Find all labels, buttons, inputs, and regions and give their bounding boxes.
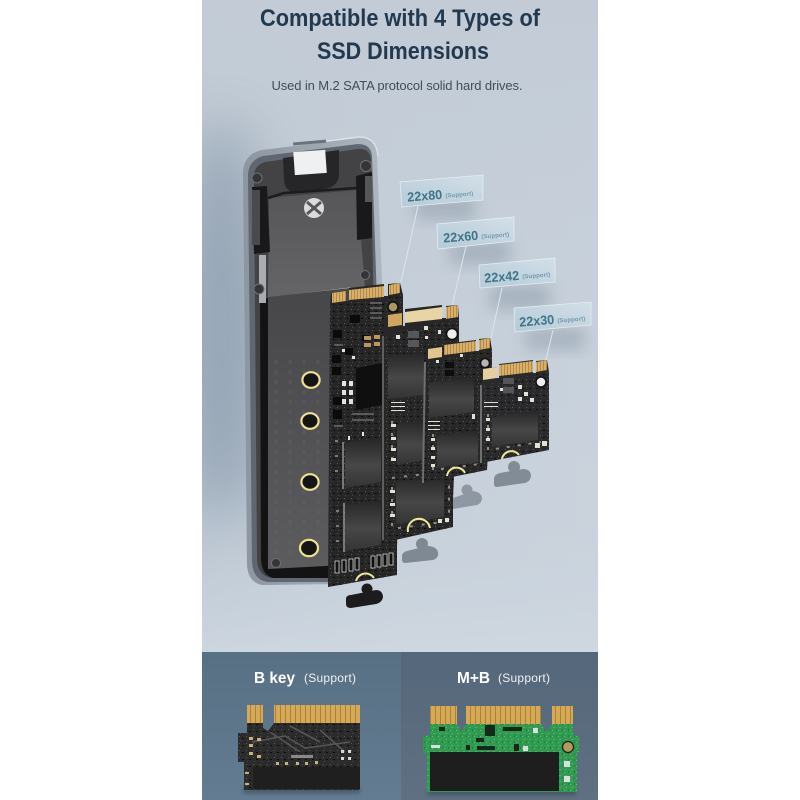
subtitle text: Used in M.2 SATA protocol solid hard drives. xyxy=(272,78,522,93)
components xyxy=(332,315,369,419)
enclosure: open SSD case xyxy=(243,137,384,585)
M+B board xyxy=(423,706,579,795)
label shadows xyxy=(415,195,585,350)
label: 22x80: (Support) xyxy=(445,191,474,200)
components xyxy=(484,385,547,448)
ghost screw: 22x30 xyxy=(494,461,531,487)
label: 22x30: 22x30 xyxy=(519,312,555,330)
chip solder pads xyxy=(433,434,480,470)
side clips xyxy=(252,172,372,254)
chips xyxy=(429,377,478,468)
title: SSD Dimensions xyxy=(317,38,489,65)
leader lines xyxy=(401,206,553,360)
pcb: 22x30 xyxy=(481,360,549,463)
chips xyxy=(343,363,382,552)
label: 22x30 xyxy=(514,302,591,332)
chip solder pads xyxy=(392,421,449,529)
panel: top background xyxy=(177,0,598,652)
usb port xyxy=(283,140,339,192)
label: 22x42: 22x42 xyxy=(484,268,520,286)
label: 22x60: (Support) xyxy=(481,232,510,241)
M+B heading: M+B xyxy=(457,670,490,687)
label: 22x42: (Support) xyxy=(522,272,551,281)
pcb: 22x42 xyxy=(422,338,492,483)
panel: M+B xyxy=(401,652,598,800)
components xyxy=(428,354,475,467)
label: 22x60: 22x60 xyxy=(443,228,479,245)
B key board xyxy=(238,705,360,793)
B key heading xyxy=(254,670,356,687)
center screw xyxy=(304,198,324,218)
title: Compatible with 4 Types of xyxy=(260,5,541,32)
label: 22x42 xyxy=(479,258,555,288)
B key heading: (Support) xyxy=(304,671,356,685)
label: 22x30: (Support) xyxy=(557,316,586,325)
label: 22x80: 22x80 xyxy=(407,187,443,205)
heat sink plate upper xyxy=(268,190,366,300)
ghost screw: 22x42 xyxy=(453,484,482,509)
screw: black thumb screw xyxy=(346,584,383,608)
panel: B key xyxy=(202,652,401,800)
pcb: 22x80 xyxy=(328,283,403,587)
B key heading: B key xyxy=(254,670,295,687)
M+B heading: (Support) xyxy=(498,671,550,685)
label: 22x80 xyxy=(400,175,483,207)
ghost screw: 22x60 xyxy=(402,538,438,563)
heat sink plate lower xyxy=(268,288,350,569)
standoffs xyxy=(300,372,320,556)
chips xyxy=(388,352,444,524)
components xyxy=(390,326,449,523)
chip xyxy=(492,410,538,447)
M+B heading xyxy=(457,670,550,687)
label: 22x60 xyxy=(437,217,514,249)
title xyxy=(260,5,541,65)
corner screws xyxy=(252,160,372,568)
pcb: 22x60 xyxy=(382,305,459,543)
chip solder pads xyxy=(488,414,541,450)
